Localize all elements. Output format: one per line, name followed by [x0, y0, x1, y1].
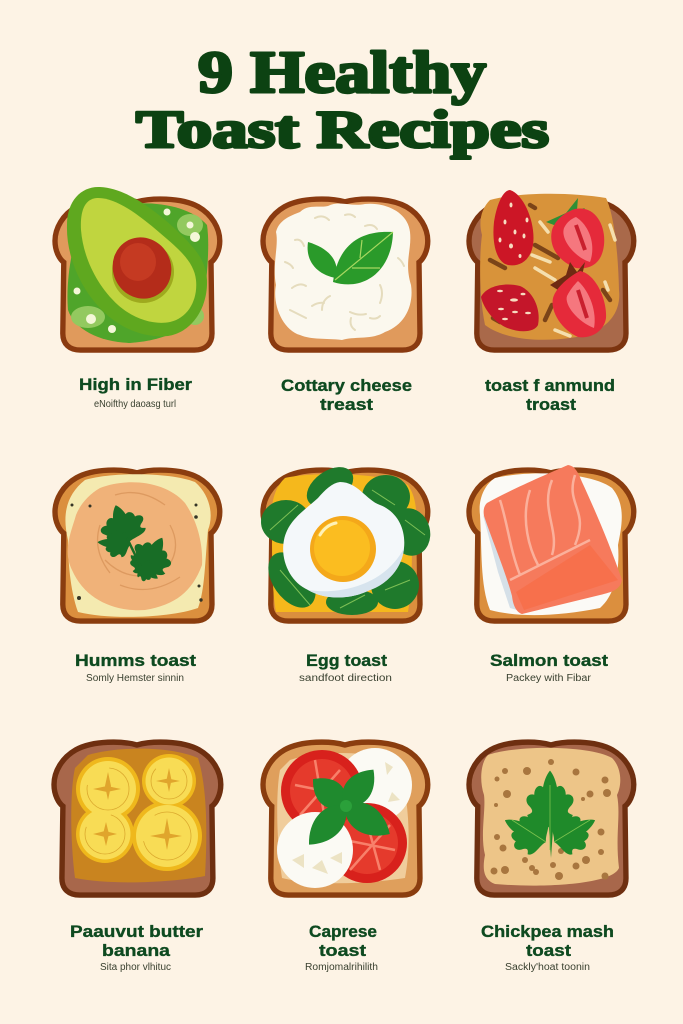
panel: salmon toast — [469, 465, 634, 684]
recipe caption: Sackly'hoat toonin — [505, 962, 590, 973]
icon: hummus toast — [55, 470, 220, 621]
icon: banana slices — [76, 754, 202, 871]
icon: cottage cheese toast — [263, 199, 428, 350]
recipe title: treast — [320, 395, 373, 414]
icon: peanut butter banana toast — [54, 742, 221, 895]
icon: cilantro — [495, 771, 605, 860]
recipe title: Paauvut butter — [70, 922, 203, 941]
recipe title: Cottary cheese — [281, 376, 412, 395]
icon: strawberry almond toast — [469, 190, 634, 350]
recipe title: toast — [319, 941, 366, 960]
icon: parsley — [95, 498, 180, 587]
recipe title: banana — [102, 941, 171, 960]
icon: salmon toast — [469, 465, 634, 621]
panel: avocado toast — [55, 187, 220, 410]
recipe title: toast f anmund — [485, 376, 615, 395]
title: 9 Healthy — [198, 39, 486, 105]
icon: halved strawberry — [550, 262, 606, 337]
icon: tomato slice — [327, 803, 407, 883]
recipe title: troast — [526, 395, 576, 414]
recipe caption: Romjomalrihilith — [305, 962, 378, 973]
icon: whole strawberry — [481, 284, 539, 331]
icon: spinach leaves — [259, 459, 436, 616]
title: Toast Recipes — [136, 101, 549, 159]
panel: cottage cheese toast — [263, 199, 428, 414]
icon: mozzarella slice — [277, 812, 353, 888]
title — [136, 39, 549, 159]
recipe title: toast — [526, 941, 571, 960]
recipe caption: Somly Hemster sinnin — [86, 673, 184, 684]
panel: chickpea mash toast — [469, 742, 634, 973]
recipe title: Salmon toast — [490, 651, 608, 670]
recipe caption: Sita phor vlhituc — [100, 962, 171, 973]
recipe title — [281, 376, 412, 414]
recipe caption: sandfoot direction — [299, 673, 392, 684]
recipe title: Chickpea mash — [481, 922, 614, 941]
recipe title: Egg toast — [306, 651, 387, 670]
icon: mozzarella slice — [338, 748, 412, 822]
icon: fried egg — [283, 482, 404, 598]
recipe caption: eNoifthy daoasg turl — [94, 399, 176, 410]
icon: halved strawberry — [546, 198, 604, 268]
panel: hummus toast — [55, 470, 220, 684]
icon: salmon fillet — [484, 465, 622, 614]
recipe caption: Packey with Fibar — [506, 673, 592, 684]
panel: peanut butter banana toast — [54, 742, 221, 973]
icon: avocado toast — [55, 187, 220, 350]
icon: whole strawberry — [493, 190, 533, 265]
recipe title: High in Fiber — [79, 375, 192, 394]
recipe title — [485, 376, 615, 414]
panel: strawberry almond toast — [469, 190, 634, 414]
recipe title: Humms toast — [75, 651, 196, 670]
panel: egg toast — [259, 459, 436, 684]
icon: basil leaves — [299, 761, 397, 854]
panel: caprese toast — [263, 742, 428, 973]
recipe title — [70, 922, 203, 960]
icon: tomato slice — [281, 750, 363, 832]
recipe title: Caprese — [309, 922, 377, 941]
icon: basil leaf — [308, 232, 393, 284]
recipe title — [309, 922, 377, 960]
icon: chickpea mash toast — [469, 742, 634, 895]
icon: caprese toast — [263, 742, 428, 895]
icon: egg toast — [259, 459, 436, 621]
recipe title — [481, 922, 614, 960]
